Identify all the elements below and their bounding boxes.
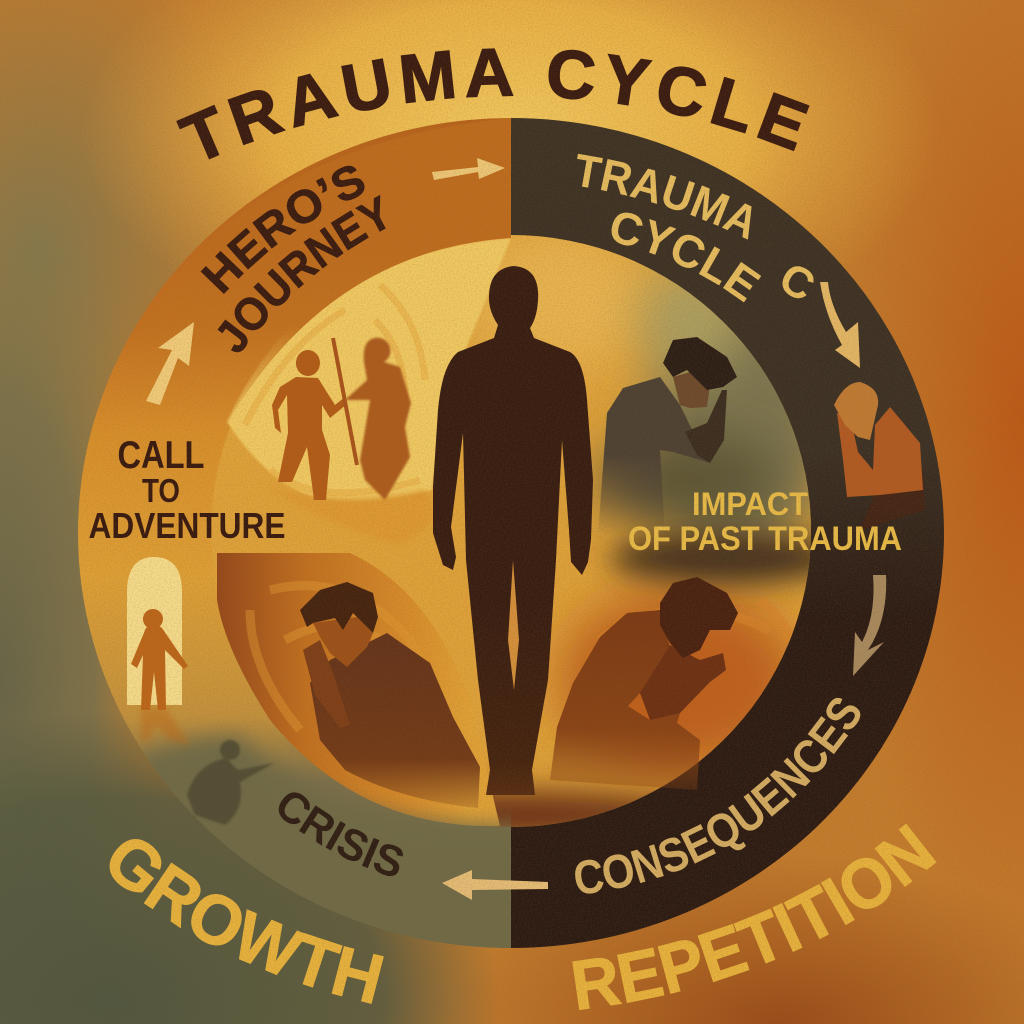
arrow: left xyxy=(146,322,194,405)
scene: orange swirl strokes xyxy=(598,596,793,646)
arrow: top xyxy=(432,158,505,180)
scene: recessed wall xyxy=(217,553,500,826)
arch doorway xyxy=(127,557,182,705)
figures: two people with staff xyxy=(272,338,411,500)
label: Hero's Journey: HERO’S xyxy=(200,166,365,294)
label: Trauma Cycle in ring: C xyxy=(771,253,823,312)
label: Call to Adventure: ADVENTURE xyxy=(88,505,286,546)
figure: small crouching person xyxy=(187,740,274,825)
label: Call to Adventure: TO xyxy=(142,472,180,509)
olive band lower left xyxy=(140,724,511,948)
figure: head in hands, ring xyxy=(834,382,925,530)
label: Impact of Past Trauma: OF PAST TRAUMA xyxy=(628,520,902,558)
figure: kneeling man, bottom right xyxy=(550,577,738,790)
label: Impact of Past Trauma: IMPACT xyxy=(692,486,808,522)
panel: left half of ring xyxy=(78,118,511,948)
label: Consequences: CONSEQUENCES xyxy=(575,698,860,894)
figure: head in hand, top right xyxy=(598,337,737,535)
label: Hero's Journey: JOURNEY xyxy=(218,194,386,352)
figure: left person xyxy=(272,350,347,500)
panel: trauma cycle ring, right half xyxy=(511,118,944,948)
label: Repetition: REPETITION xyxy=(572,824,936,1010)
figure: crouching man, bottom left xyxy=(300,582,480,808)
panel: inner circle scene xyxy=(200,230,840,840)
label: Growth: GROWTH xyxy=(110,839,384,1004)
arrow: right xyxy=(853,575,886,676)
figure: staff xyxy=(333,338,357,465)
scene: swirl strokes in glow xyxy=(245,285,425,493)
orange gap xyxy=(628,693,650,720)
label: Call to Adventure xyxy=(88,434,286,546)
label: Trauma Cycle in ring: CYCLE xyxy=(612,212,762,302)
figure: right person xyxy=(345,338,411,500)
label: Trauma Cycle in ring: TRAUMA xyxy=(577,154,752,240)
scene: floor swirl xyxy=(262,485,433,545)
scene: wall swirl strokes xyxy=(250,586,455,750)
figure in doorway xyxy=(131,609,190,745)
label: Trauma Cycle in ring xyxy=(577,154,823,312)
leg gap xyxy=(508,560,519,690)
main circle xyxy=(78,118,944,948)
title: Trauma Cycle: TRAUMA CYCLE xyxy=(176,48,810,160)
label: Crisis: CRISIS xyxy=(278,792,403,876)
figure: central man silhouette xyxy=(433,266,593,795)
ring: orange band above scene xyxy=(100,118,511,430)
scene: glow lens xyxy=(227,238,511,502)
arrow: upper right xyxy=(820,282,860,368)
arrow: bottom xyxy=(442,870,548,900)
label: Impact of Past Trauma xyxy=(628,486,902,558)
label: Call to Adventure: CALL xyxy=(118,434,204,477)
